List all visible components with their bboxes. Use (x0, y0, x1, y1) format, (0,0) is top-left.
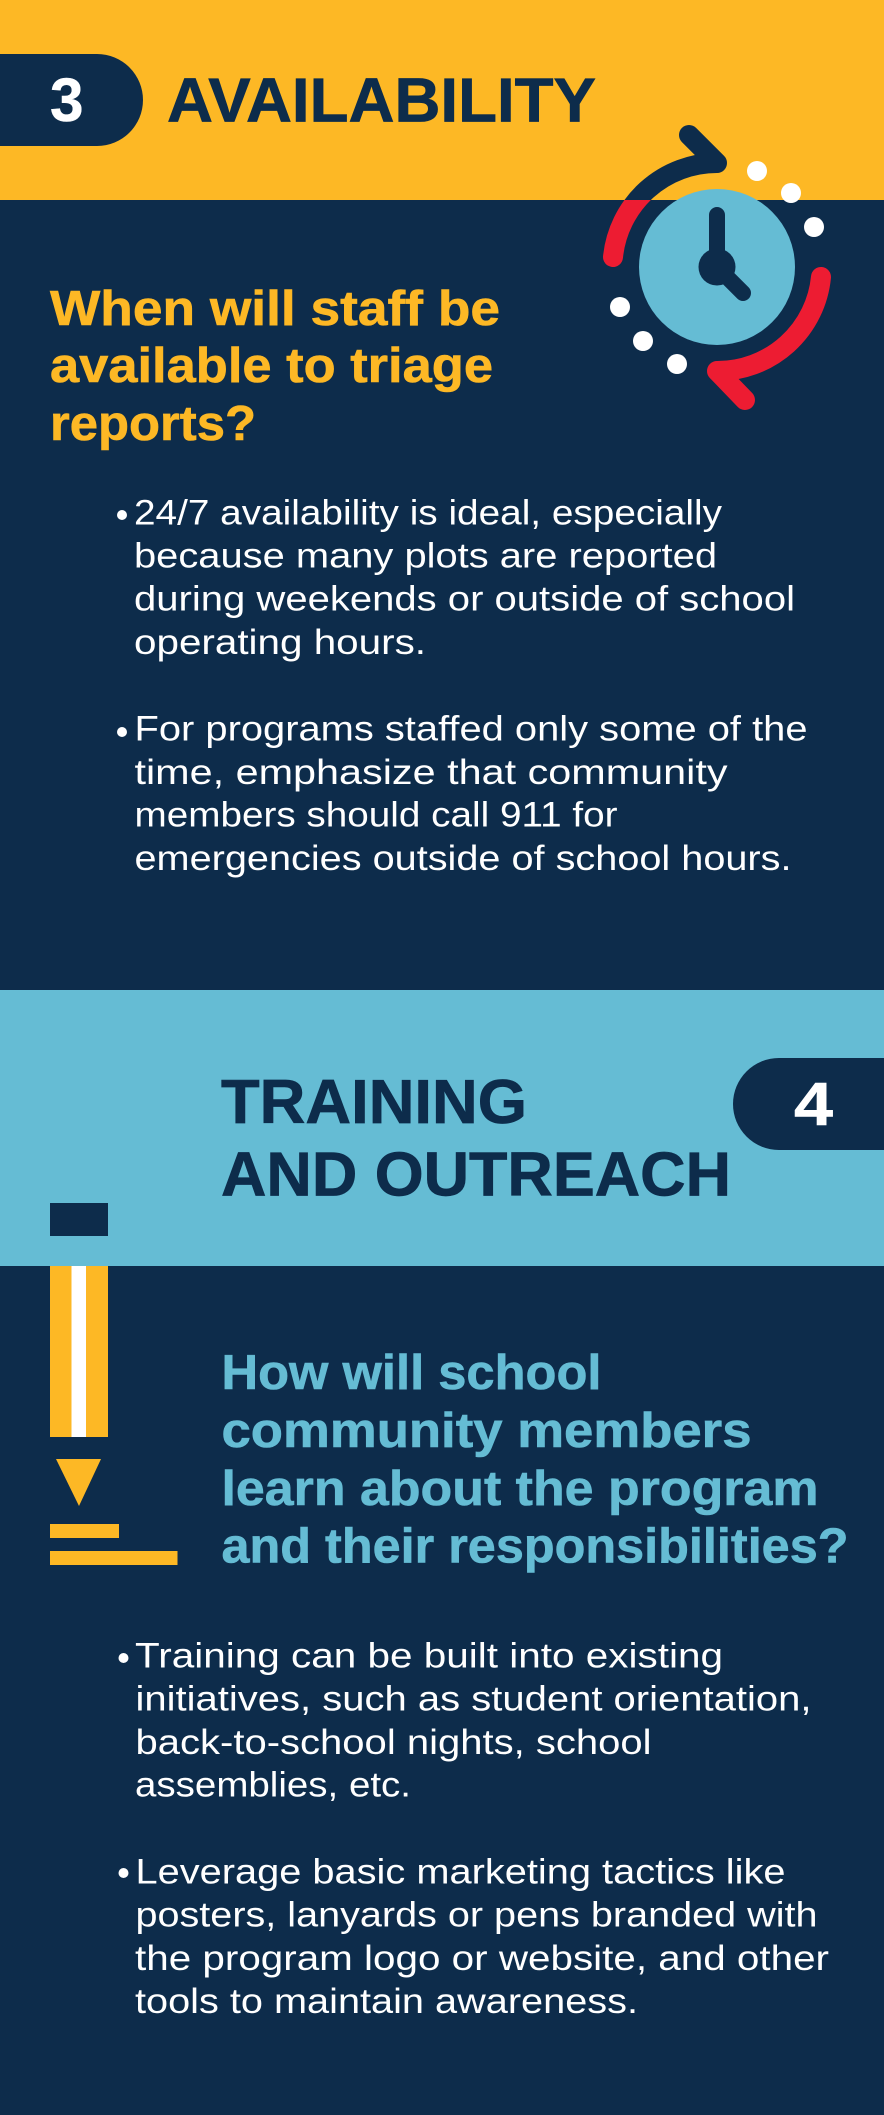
text block: bullet training initiatives (118, 1636, 812, 1805)
dots (610, 161, 824, 374)
heading: availability: AVAILABILITY (167, 66, 596, 136)
pencil tip (56, 1459, 101, 1506)
icon: pencil (50, 1203, 178, 1565)
text block: bullet part-time programs (117, 709, 808, 878)
icon: clock with circular arrows (610, 135, 824, 400)
heading: training and outreach: AND OUTREACH (221, 1140, 731, 1210)
text block: bullet training initiatives: Training can be built into existing (135, 1636, 723, 1676)
question: training (222, 1346, 848, 1574)
panel: availability header band (0, 0, 884, 200)
text block: bullet 24/7 availability (117, 492, 795, 662)
question: availability: available to triage (50, 339, 493, 393)
question: availability (50, 282, 500, 451)
arrow: bottom right (717, 277, 821, 400)
text block: bullet 24/7 availability: during weekends or outside of school (134, 579, 795, 619)
number badge 3: 3 (50, 66, 84, 134)
number badge 4: 4 (794, 1070, 833, 1138)
text block: bullet part-time programs: emergencies outside of school hours. (134, 838, 792, 878)
text block: bullet training initiatives: back-to-school nights, school (136, 1722, 652, 1762)
panel: training header band (0, 990, 884, 1266)
text block: bullet marketing tactics: Leverage basic marketing tactics like (136, 1851, 786, 1891)
clock hands (698, 215, 743, 293)
question: training: learn about the program (222, 1462, 818, 1516)
heading: training and outreach (221, 1068, 731, 1210)
question: availability: When will staff be (50, 282, 500, 336)
pencil body (50, 1266, 108, 1437)
pencil eraser (50, 1203, 108, 1236)
text block: bullet 24/7 availability: 24/7 availability is ideal, especially (134, 492, 722, 532)
question: availability: reports? (50, 397, 256, 451)
text block: bullet part-time programs: members should call 911 for (134, 795, 618, 835)
number badge 3 (0, 54, 143, 146)
number badge 4 (733, 1058, 884, 1150)
arrow: top left (613, 135, 717, 257)
heading: training and outreach: TRAINING (221, 1068, 527, 1137)
clock face (639, 189, 795, 345)
text block: bullet 24/7 availability: operating hours. (134, 622, 426, 662)
text block: bullet training initiatives: assemblies, etc. (135, 1765, 411, 1805)
writing lines (50, 1524, 178, 1565)
question: training: How will school (222, 1346, 602, 1400)
text block: bullet 24/7 availability: because many plots are reported (134, 536, 717, 576)
text block: bullet part-time programs: For programs staffed only some of the (134, 709, 808, 749)
text block: bullet marketing tactics: tools to maintain awareness. (135, 1981, 638, 2021)
text block: bullet marketing tactics: posters, lanyards or pens branded with (136, 1895, 818, 1935)
text block: bullet marketing tactics: the program logo or website, and other (135, 1938, 829, 1978)
text block: bullet part-time programs: time, emphasize that community (134, 752, 728, 792)
question: training: community members (222, 1404, 752, 1458)
text block: bullet marketing tactics (118, 1851, 829, 2021)
question: training: and their responsibilities? (222, 1520, 848, 1574)
text block: bullet training initiatives: initiatives, such as student orientation, (136, 1679, 812, 1719)
